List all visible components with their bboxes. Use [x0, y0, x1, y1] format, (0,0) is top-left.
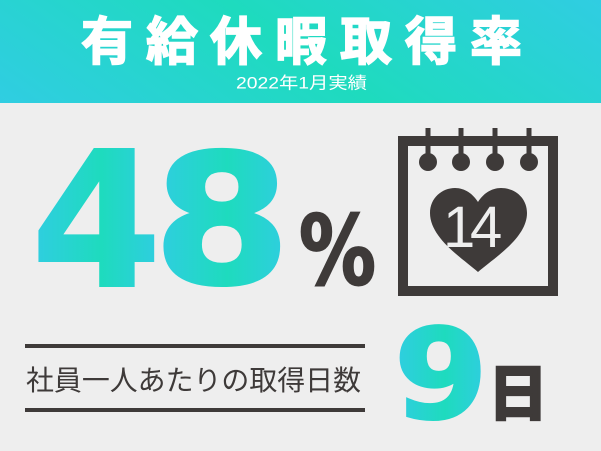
label rule bottom [25, 408, 365, 412]
big number: 9: 9 [394, 302, 488, 448]
heart [430, 188, 527, 272]
big number: 48: 8 [153, 116, 291, 326]
label rule top [25, 344, 365, 348]
big number: 48: 4 [31, 112, 162, 331]
big number: 48 [31, 112, 291, 331]
date number: 14 [443, 195, 502, 260]
icon: calendar with heart [403, 128, 553, 291]
label: per-employee days taken: 社員一人あたりの取得日数 [26, 365, 361, 396]
header band [0, 0, 601, 103]
title: 有給休暇取得率 [81, 14, 522, 72]
unit: day: 日 [488, 361, 548, 428]
percent sign: % [299, 195, 376, 307]
subtitle: 2022年1月実績 [236, 74, 367, 92]
calendar rings [419, 128, 538, 171]
